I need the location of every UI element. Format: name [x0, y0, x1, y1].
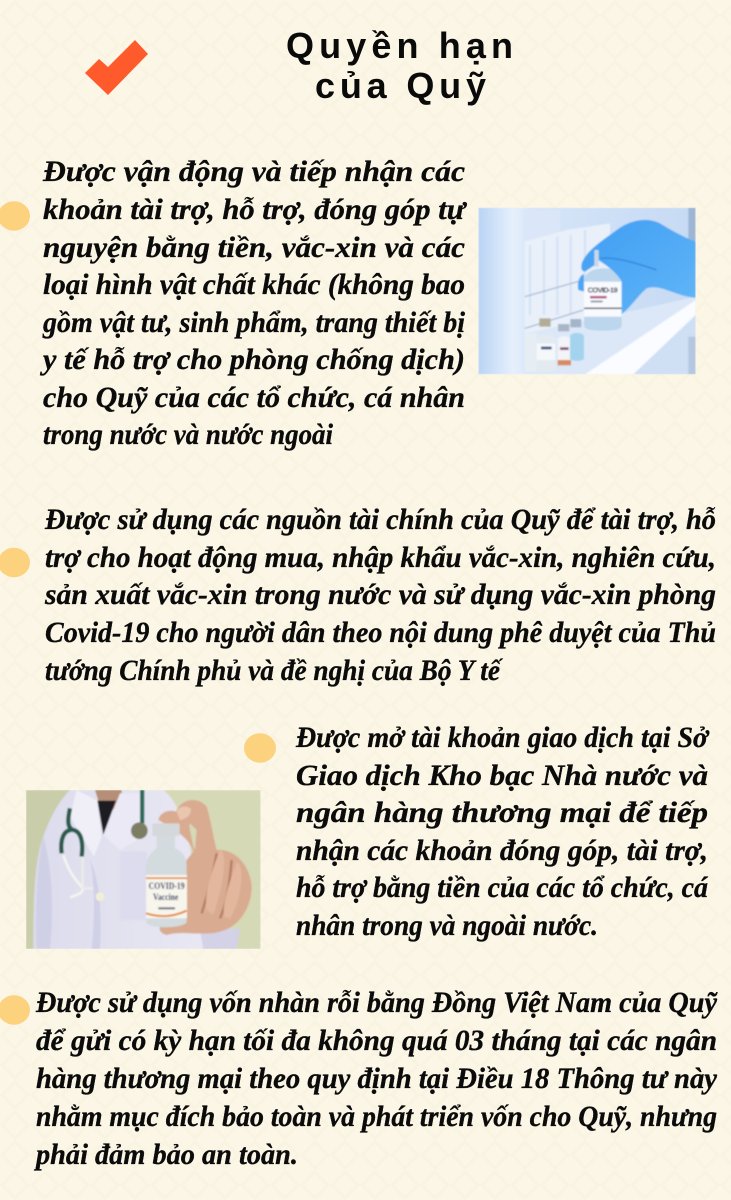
photo: gloved hand holding COVID-19 vial: COVID-19 — [588, 286, 618, 295]
icon: orange check mark — [85, 40, 148, 95]
text block 2 — [44, 503, 716, 687]
photo: doctor holding COVID-19 vaccine vial — [26, 790, 261, 949]
bullet dot 1 — [0, 201, 30, 231]
coat — [33, 790, 203, 949]
text block 3: Được mở tài khoản giao dịch tại Sở — [295, 721, 710, 754]
text block 3: nhân trong và ngoài nước. — [296, 909, 598, 942]
bullet dot 2 — [0, 548, 30, 577]
text block 3 — [295, 721, 710, 942]
text block 4: để gửi có kỳ hạn tối đa không quá 03 tháng tại các ngân — [36, 1024, 717, 1057]
text block 1: khoản tài trợ, hỗ trợ, đóng góp tự — [43, 193, 467, 226]
text block 2: sản xuất vắc-xin trong nước và sử dụng vắc-xin phòng — [44, 578, 716, 611]
text block 4: hàng thương mại theo quy định tại Điều 18 Thông tư này — [36, 1062, 718, 1095]
text block 3: Giao dịch Kho bạc Nhà nước và — [296, 759, 708, 792]
photo: doctor holding COVID-19 vaccine vial: Vaccine — [153, 892, 178, 902]
text block 3: hỗ trợ bằng tiền của các tổ chức, cá — [296, 871, 709, 904]
text block 1: gồm vật tư, sinh phẩm, trang thiết bị — [42, 306, 466, 339]
title — [286, 25, 513, 106]
text block 4: phải đảm bảo an toàn. — [33, 1138, 298, 1171]
text block 1: trong nước và nước ngoài — [43, 418, 334, 451]
title: Quyền hạn — [286, 25, 513, 66]
title: của Quỹ — [315, 65, 486, 106]
bullet dot 4 — [0, 995, 30, 1025]
sleeve — [200, 928, 240, 949]
bullet dot 3 — [244, 733, 276, 763]
text block 1 — [40, 155, 467, 451]
text block 1: cho Quỹ của các tổ chức, cá nhân — [43, 381, 465, 414]
text block 3: nhận các khoản đóng góp, tài trợ, — [296, 834, 708, 867]
photo: doctor holding COVID-19 vaccine vial: COVID-19 — [149, 881, 185, 891]
text block 3: ngân hàng thương mại để tiếp — [296, 796, 708, 829]
text block 1: nguyện bằng tiền, vắc-xin và các — [43, 231, 465, 264]
large vial — [584, 268, 622, 331]
stethoscope — [68, 808, 82, 857]
small vials — [539, 318, 551, 327]
vial — [152, 823, 180, 836]
hand — [158, 800, 252, 935]
gloved hand — [581, 220, 696, 314]
text block 1: y tế hỗ trợ cho phòng chống dịch) — [40, 343, 465, 376]
text block 1: loại hình vật chất khác (không bao — [43, 268, 465, 301]
photo: gloved hand holding COVID-19 vial — [478, 208, 696, 374]
text block 2: trợ cho hoạt động mua, nhập khẩu vắc-xin, nghiên cứu, — [45, 541, 716, 574]
text block 4 — [33, 986, 718, 1171]
text block 2: tướng Chính phủ và đề nghị của Bộ Y tế — [45, 654, 503, 687]
text block 1: Được vận động và tiếp nhận các — [42, 155, 465, 188]
